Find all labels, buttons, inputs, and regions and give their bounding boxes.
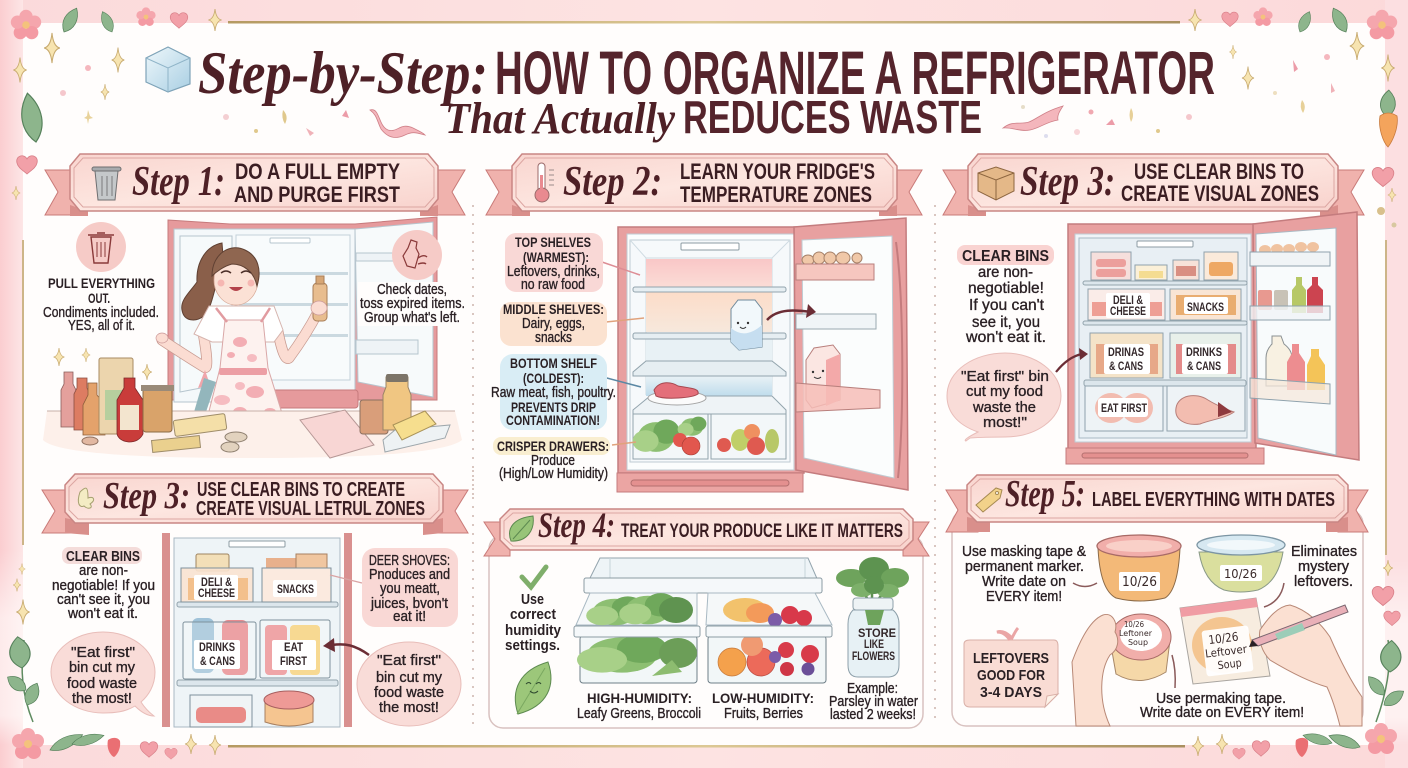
text: use correct humidity bbox=[505, 591, 562, 654]
panel: step 3 bottom bbox=[42, 474, 468, 727]
panel: step 4 bbox=[484, 505, 929, 728]
icon: juice carton on door bbox=[806, 345, 840, 408]
label: bottom shelf: Raw meat, fish, poultry. bbox=[491, 385, 616, 401]
arrow: middle shelves bbox=[606, 318, 644, 322]
text: use correct humidity: settings. bbox=[505, 637, 560, 654]
illustration: bag with pen and hand bbox=[1180, 598, 1362, 726]
icon: leaf bbox=[510, 516, 533, 541]
text: clear bins: are non- bbox=[79, 563, 128, 579]
title bbox=[146, 39, 1215, 143]
speech bubble: eat first: waste the bbox=[972, 399, 1036, 416]
illustration: hand with small container: 10/26 bbox=[1124, 620, 1144, 629]
text: clear bins: CLEAR BINS bbox=[962, 248, 1049, 265]
label: top shelves bbox=[505, 233, 603, 293]
panel: step 5 bbox=[946, 473, 1368, 726]
text: clear bins: won't eat it. bbox=[67, 606, 138, 622]
text: check dates: Group what's left. bbox=[364, 310, 460, 326]
banner: step 1: AND PURGE FIRST bbox=[234, 182, 400, 207]
callout: deer shoves: juices, bvon't bbox=[370, 596, 448, 612]
label: top shelves: (WARMEST): bbox=[523, 249, 589, 265]
drawer: high humidity bbox=[574, 593, 700, 683]
arrow: milk to door bbox=[767, 304, 816, 320]
arrow: to bag bbox=[1264, 583, 1284, 607]
text: use masking tape: permanent marker. bbox=[965, 559, 1084, 575]
text: use masking tape: EVERY item! bbox=[986, 589, 1062, 605]
label: crisper drawers bbox=[493, 437, 610, 482]
illustration: bag with pen and hand: 10/26 bbox=[1208, 630, 1239, 647]
banner: step 3 bottom: Step 3: bbox=[103, 475, 190, 517]
illustration: counter with condiments bbox=[43, 348, 462, 458]
text: use permaking tape: Use permaking tape. bbox=[1156, 691, 1286, 707]
frame bbox=[952, 510, 1363, 726]
text: clear bins: negotiable! bbox=[968, 280, 1044, 297]
banner: step 5 bbox=[946, 473, 1368, 532]
bin labels: CHEESE bbox=[198, 588, 235, 600]
icon: cardboard box bbox=[978, 167, 1014, 200]
bin labels: DELI & bbox=[1113, 295, 1143, 307]
bin labels: SNACKS bbox=[1187, 302, 1224, 314]
icon: pull out trash circle bbox=[76, 222, 126, 272]
text: clear bins: If you can't bbox=[969, 297, 1045, 314]
speech bubble: eat first left: bin cut my bbox=[69, 659, 135, 676]
banner: step 5: Step 5: bbox=[1005, 473, 1085, 515]
bin labels: & CANS bbox=[1109, 361, 1143, 373]
panel: step 2 bbox=[486, 154, 922, 492]
text: clear bins: can't see it, you bbox=[57, 592, 150, 608]
illustration: glass container with date: 10/26 bbox=[1224, 566, 1257, 581]
arrow: crisper bbox=[612, 442, 636, 445]
bin labels: CHEESE bbox=[1110, 306, 1146, 318]
text: parsley example: lasted 2 weeks! bbox=[830, 707, 916, 723]
text: clear bins bbox=[52, 547, 155, 622]
icon: green check bbox=[522, 567, 546, 587]
fridge: open and empty bbox=[168, 217, 437, 408]
banner: step 3 bottom: USE CLEAR BINS TO CREATE bbox=[197, 479, 405, 501]
icon: thermometer bbox=[535, 163, 554, 202]
banner: step 3 top bbox=[943, 154, 1364, 216]
text: parsley example: Example: bbox=[847, 681, 898, 697]
callout: deer shoves: you meatt, bbox=[380, 581, 440, 597]
icon: steak on plate bbox=[648, 383, 706, 405]
text: clear bins: won't eat it. bbox=[965, 329, 1046, 346]
text: eliminates mystery leftovers: mystery bbox=[1298, 559, 1350, 575]
bin labels: FIRST bbox=[280, 656, 307, 668]
produce: high humidity drawer bbox=[633, 417, 706, 455]
text: use masking tape bbox=[962, 544, 1086, 605]
bin labels: SNACKS bbox=[277, 584, 314, 596]
banner: step 2 bbox=[486, 154, 922, 216]
icon: milk carton bbox=[731, 300, 762, 350]
callout: deer shoves: eat it! bbox=[393, 609, 426, 625]
text: clear bins bbox=[957, 245, 1054, 346]
banner: step 1: Step 1: bbox=[132, 159, 225, 205]
produce: low humidity drawer bbox=[717, 424, 779, 455]
text: clear bins: negotiable! If you bbox=[52, 578, 155, 594]
label: middle shelves: MIDDLE SHELVES: bbox=[503, 301, 604, 317]
label: top shelves: no raw food bbox=[521, 277, 585, 293]
bin labels: & CANS bbox=[1187, 361, 1221, 373]
icon: price tag bbox=[976, 488, 1002, 512]
text: parsley example: Parsley in water bbox=[829, 694, 918, 710]
text: use masking tape: Write date on bbox=[982, 574, 1066, 590]
decorative corner: top right bbox=[1021, 5, 1397, 147]
speech bubble: eat first left: food waste bbox=[67, 675, 137, 692]
text: clear bins: CLEAR BINS bbox=[66, 549, 140, 565]
speech bubble: eat first right: "Eat first" bbox=[377, 652, 441, 669]
arrow: to eat first bin bbox=[323, 638, 369, 655]
sticky note: leftovers: LEFTOVERS bbox=[973, 650, 1049, 667]
banner: step 2: TEMPERATURE ZONES bbox=[680, 182, 872, 207]
illustration: glass container with date bbox=[1197, 535, 1285, 592]
speech bubble: eat first left bbox=[51, 632, 155, 716]
arrow: bottom shelf bbox=[603, 377, 641, 387]
banner: step 3 bottom bbox=[42, 474, 468, 535]
text: use permaking tape: Write date on EVERY item! bbox=[1140, 705, 1304, 721]
illustration: parsley in jar: FLOWERS bbox=[852, 651, 895, 663]
text: pull everything bbox=[43, 275, 159, 334]
illustration: crisper drawers bbox=[574, 558, 832, 683]
sticky note: leftovers bbox=[964, 628, 1058, 707]
speech bubble: eat first left: the most! bbox=[72, 690, 132, 707]
text: pull everything: OUT. bbox=[88, 290, 110, 306]
label: bottom shelf: BOTTOM SHELF bbox=[510, 355, 597, 371]
icon: herb sprig bbox=[78, 488, 94, 508]
banner: step 4 bbox=[484, 505, 929, 556]
fridge with temperature zones bbox=[617, 218, 908, 492]
label: low humidity: LOW-HUMIDITY: bbox=[712, 690, 814, 706]
speech bubble: eat first right: food waste bbox=[374, 684, 444, 701]
bin labels: EAT FIRST bbox=[1101, 403, 1147, 415]
sticky note: leftovers: GOOD FOR bbox=[977, 667, 1045, 684]
drawer: low humidity bbox=[706, 593, 832, 683]
banner: step 3 top: CREATE VISUAL ZONES bbox=[1121, 181, 1319, 206]
label: crisper drawers: Produce bbox=[531, 453, 575, 469]
text: use permaking tape bbox=[1140, 691, 1304, 721]
illustration: parsley in jar: STORE bbox=[858, 628, 896, 640]
bin labels bbox=[194, 575, 317, 670]
label: low humidity: Fruits, Berries bbox=[724, 706, 803, 722]
door shelves with eggs and bottles bbox=[1250, 242, 1330, 404]
text: use masking tape: Use masking tape & bbox=[962, 544, 1086, 560]
bin labels: DRINKS bbox=[1186, 347, 1222, 359]
text: eliminates mystery leftovers: leftovers. bbox=[1294, 574, 1353, 590]
arrow: top shelves bbox=[602, 262, 640, 275]
speech bubble: eat first left: "Eat first" bbox=[71, 644, 135, 661]
speech bubble: eat first: most!" bbox=[983, 414, 1027, 431]
frame bbox=[489, 535, 923, 728]
label: middle shelves: Dairy, eggs, bbox=[522, 316, 585, 332]
banner: step 3 top: USE CLEAR BINS TO bbox=[1134, 159, 1304, 184]
text: pull everything: PULL EVERYTHING bbox=[48, 275, 155, 291]
fridge interior with bins bbox=[162, 533, 352, 727]
decorative side: lower left bbox=[4, 564, 221, 759]
label: top shelves: Leftovers, drinks, bbox=[507, 264, 600, 280]
decorative side: lower right bbox=[1192, 167, 1407, 759]
illustration: parsley in jar: LIKE bbox=[864, 639, 884, 651]
illustration: hand with small container bbox=[1072, 614, 1171, 726]
decorative corner: top left bbox=[11, 5, 349, 200]
text: use correct humidity: Use bbox=[521, 591, 544, 608]
text: check dates: toss expired items. bbox=[360, 296, 465, 312]
banner: step 3 top: Step 3: bbox=[1020, 159, 1115, 205]
sticky note: leftovers: 3-4 DAYS bbox=[980, 684, 1042, 701]
label: high humidity: HIGH-HUMIDITY: bbox=[587, 690, 692, 706]
banner: step 4: Step 4: bbox=[538, 505, 615, 545]
text: check dates bbox=[358, 282, 468, 326]
illustration: bag with pen and hand: Soup bbox=[1217, 656, 1242, 672]
panel: step 3 top bbox=[943, 154, 1364, 464]
bin labels: & CANS bbox=[200, 656, 235, 668]
bin labels: EAT bbox=[284, 642, 303, 654]
banner: step 2: LEARN YOUR FRIDGE'S bbox=[680, 159, 875, 184]
text: parsley example bbox=[829, 681, 918, 723]
label: crisper drawers: CRISPER DRAWERS: bbox=[497, 438, 609, 454]
text: pull everything: Condiments included. bbox=[43, 305, 159, 321]
text: use correct humidity: humidity bbox=[505, 622, 562, 639]
illustration: woman with apron bbox=[156, 243, 327, 423]
label: crisper drawers: (High/Low Humidity) bbox=[499, 466, 608, 482]
illustration: orange container with date: 10/26 bbox=[1122, 575, 1157, 590]
banner: step 3 bottom: CREATE VISUAL LETRUL ZONES bbox=[196, 498, 425, 520]
label: high humidity bbox=[577, 690, 701, 722]
speech bubble: eat first bbox=[947, 353, 1061, 441]
label: bottom shelf bbox=[491, 354, 616, 430]
banner: step 1 bbox=[45, 154, 465, 216]
text: clear bins: see it, you bbox=[972, 314, 1040, 331]
arrow: to orange container bbox=[1073, 583, 1097, 586]
label: high humidity: Leafy Greens, Broccoli bbox=[577, 706, 701, 722]
text: eliminates mystery leftovers bbox=[1291, 544, 1357, 590]
banner: step 4: TREAT YOUR PRODUCE LIKE IT MATTERS bbox=[621, 521, 903, 542]
illustration: hand with small container: Soup bbox=[1128, 638, 1148, 647]
bin labels: DELI & bbox=[201, 577, 232, 589]
arrow: to drinks bin bbox=[1056, 348, 1088, 372]
label: bottom shelf: CONTAMINATION! bbox=[506, 412, 600, 428]
illustration: hand with small container: Leftoner bbox=[1119, 629, 1153, 638]
callout: deer shoves: DEER SHOVES: bbox=[369, 553, 450, 569]
fridge with labeled bins bbox=[1066, 212, 1359, 464]
panel: step 1 bbox=[43, 154, 468, 458]
label: low humidity bbox=[712, 690, 814, 722]
banner: step 1: DO A FULL EMPTY bbox=[235, 159, 400, 184]
label: top shelves: TOP SHELVES bbox=[515, 234, 591, 250]
label: bottom shelf: (COLDEST): bbox=[523, 370, 584, 386]
callout: deer shoves bbox=[330, 548, 458, 627]
title: Step-by-Step: bbox=[198, 40, 488, 106]
text: pull everything: YES, all of it. bbox=[68, 318, 135, 334]
icon: hand with bottle circle bbox=[392, 230, 442, 280]
callout: deer shoves: Pnoduces and bbox=[369, 567, 450, 583]
speech bubble: eat first right: the most! bbox=[379, 699, 439, 716]
text: use correct humidity: correct bbox=[510, 606, 556, 623]
title: REDUCES WASTE bbox=[683, 91, 982, 143]
illustration: parsley in jar bbox=[836, 557, 909, 677]
speech bubble: eat first right: bin cut my bbox=[376, 669, 442, 686]
title: That Actually bbox=[445, 94, 675, 143]
text: check dates: Check dates, bbox=[377, 282, 447, 298]
arrow: from small container note bbox=[1172, 655, 1175, 688]
bin labels bbox=[1098, 293, 1228, 417]
label: bottom shelf: PREVENTS DRIP bbox=[511, 399, 596, 415]
bin labels: DRINKS bbox=[199, 642, 235, 654]
speech bubble: eat first: cut my food bbox=[966, 383, 1043, 400]
illustration: bag with pen and hand: Leftover bbox=[1204, 643, 1248, 661]
label: middle shelves: snacks bbox=[535, 330, 572, 346]
bin labels: DRINAS bbox=[1108, 347, 1144, 359]
illustration: orange container with date bbox=[1097, 535, 1181, 601]
icon: smiling leaf bbox=[515, 662, 551, 714]
text: clear bins: are non- bbox=[978, 264, 1033, 281]
speech bubble: eat first right bbox=[357, 642, 461, 726]
speech bubble: eat first: "Eat first" bin bbox=[961, 368, 1049, 385]
banner: step 2: Step 2: bbox=[563, 159, 662, 205]
text: eliminates mystery leftovers: Eliminates bbox=[1291, 544, 1357, 560]
icon: ice cube bbox=[146, 47, 190, 92]
label: middle shelves bbox=[500, 301, 607, 346]
icon: trash can bbox=[92, 167, 121, 200]
